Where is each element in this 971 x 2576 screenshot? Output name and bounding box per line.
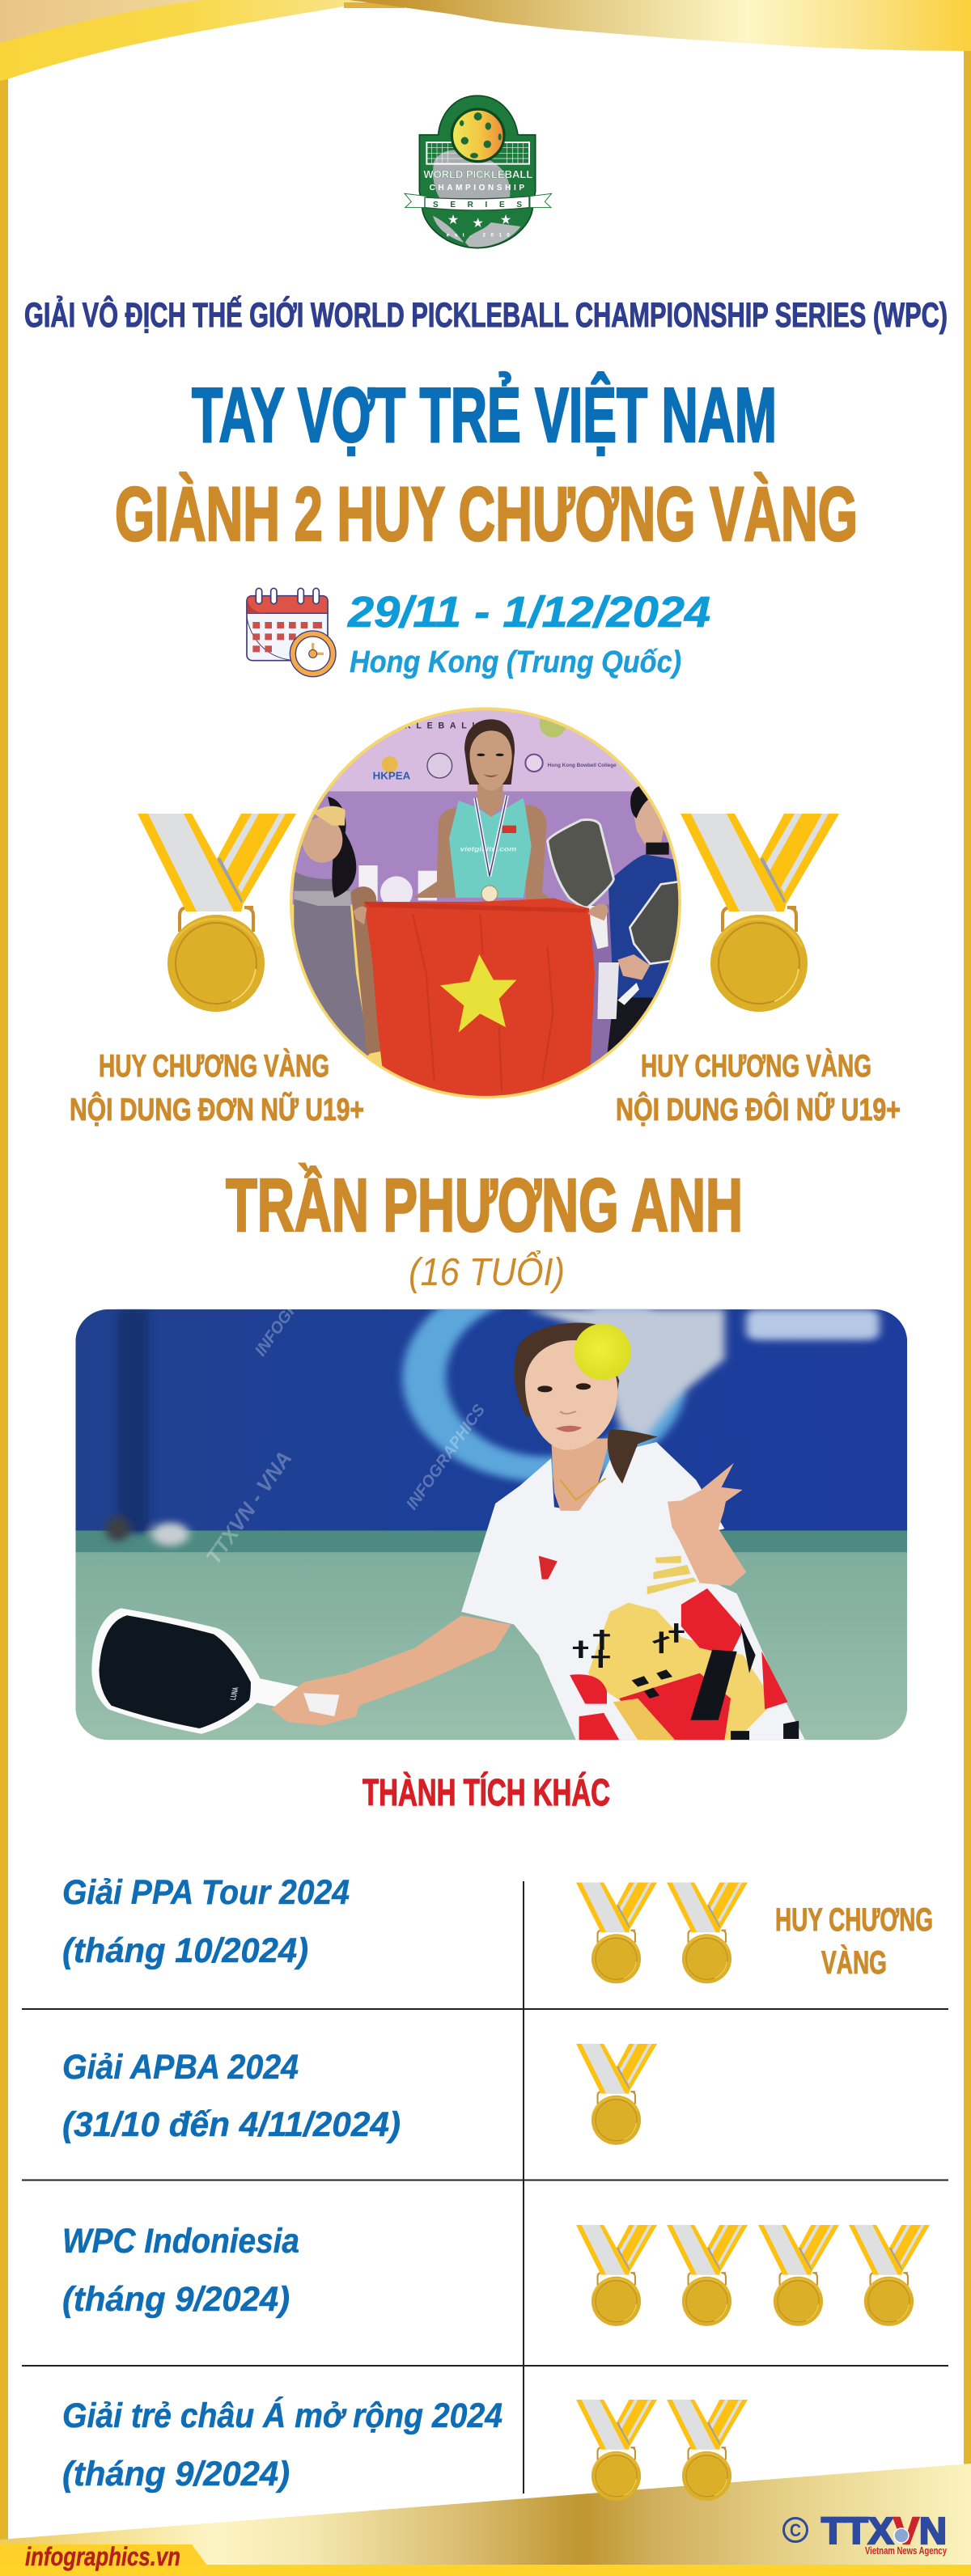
row 2 medals (576, 2044, 657, 2145)
row 4: Asian youth open: Giải trẻ châu Á mở rộng 2024 (62, 2396, 502, 2435)
logo text: ★ (473, 217, 483, 229)
row 3: WPC Indonesia (62, 2222, 930, 2326)
logo text: ★ (447, 214, 459, 226)
row 1: PPA Tour: Giải PPA Tour 2024 (62, 1873, 350, 1912)
logo strip: Hong Kong Bowbell College (548, 763, 617, 768)
logo text: WORLD PICKLEBALL (423, 169, 533, 180)
row 2: APBA (62, 2044, 657, 2145)
photo watermarks (201, 1247, 489, 1568)
photo watermarks: INFOGRAPHICS (403, 1401, 489, 1513)
TTXVN logo: TTXVN (821, 2510, 947, 2552)
flag (364, 899, 595, 1098)
row 3 medals (576, 2225, 930, 2326)
athlete photo (75, 1285, 907, 1744)
row 4: Asian youth open: (tháng 9/2024) (62, 2455, 290, 2494)
paddle (91, 1608, 299, 1734)
left woman (294, 797, 380, 1081)
photo watermarks: INFOGRAPHICS (252, 1247, 337, 1360)
central girl: vietgiaitri.com (460, 845, 517, 853)
date: 29/11 - 1/12/2024 (347, 588, 710, 637)
logo text (405, 169, 552, 238)
row 3: WPC Indonesia: WPC Indoniesia (62, 2222, 299, 2261)
legend: gold medal (775, 1902, 933, 1981)
medal caption right: HUY CHƯƠNG VÀNG (641, 1048, 871, 1084)
bottom ribbon (0, 2464, 971, 2576)
website footer: infographics.vn (25, 2542, 180, 2571)
row 2: APBA: (31/10 đến 4/11/2024) (62, 2105, 401, 2144)
athlete age: (16 TUỔI) (409, 1250, 565, 1294)
section heading: THÀNH TÍCH KHÁC (363, 1771, 610, 1813)
circular podium photo (283, 704, 688, 1098)
medal caption left (70, 1048, 364, 1127)
location: Hong Kong (Trung Quốc) (350, 645, 681, 679)
logo: World Pickleball Championship Series (405, 95, 552, 248)
shirt print (539, 1556, 799, 1740)
medal caption left: NỘI DUNG ĐƠN NỮ U19+ (70, 1091, 364, 1127)
row 1: PPA Tour (62, 1873, 748, 1983)
logo strip (374, 718, 617, 780)
medal caption right: NỘI DUNG ĐÔI NỮ U19+ (616, 1091, 901, 1127)
player (271, 1322, 805, 1740)
icon: calendar with clock (247, 588, 336, 677)
row 3: WPC Indonesia: (tháng 9/2024) (62, 2280, 290, 2319)
logo text: SERIES (433, 201, 522, 209)
row 1 medals (576, 1882, 748, 1983)
TTXVN logo: C (790, 2520, 801, 2540)
medal caption right (616, 1048, 901, 1127)
photo background (75, 1285, 907, 1744)
row 2: APBA: Giải APBA 2024 (62, 2048, 299, 2087)
medal right (681, 814, 839, 1012)
logo text: CHAMPIONSHIP (430, 184, 524, 192)
raised hand and forearm (668, 1463, 746, 1586)
top ribbon (0, 0, 971, 81)
logo text: est. 2010 (447, 232, 510, 238)
paddle: LUNA (228, 1686, 240, 1700)
table rules (22, 1881, 948, 2494)
row 4: Asian youth open (62, 2396, 748, 2501)
TTXVN logo (783, 2510, 948, 2557)
athlete name: TRẦN PHƯƠNG ANH (226, 1163, 743, 1247)
central girl (413, 719, 553, 902)
photo watermarks: TTXVN - VNA (201, 1447, 297, 1568)
right woman (597, 786, 678, 1053)
logo strip: HKPEA (373, 770, 410, 781)
logo text: ★ (500, 214, 511, 226)
row 1: PPA Tour: (tháng 10/2024) (62, 1931, 308, 1970)
legend: gold medal: VÀNG (821, 1944, 887, 1981)
row 4 medals (576, 2400, 748, 2501)
paddle (548, 819, 613, 907)
logo strip: KLEBALL (405, 721, 477, 731)
medal caption left: HUY CHƯƠNG VÀNG (99, 1048, 329, 1084)
medal left (138, 814, 296, 1012)
